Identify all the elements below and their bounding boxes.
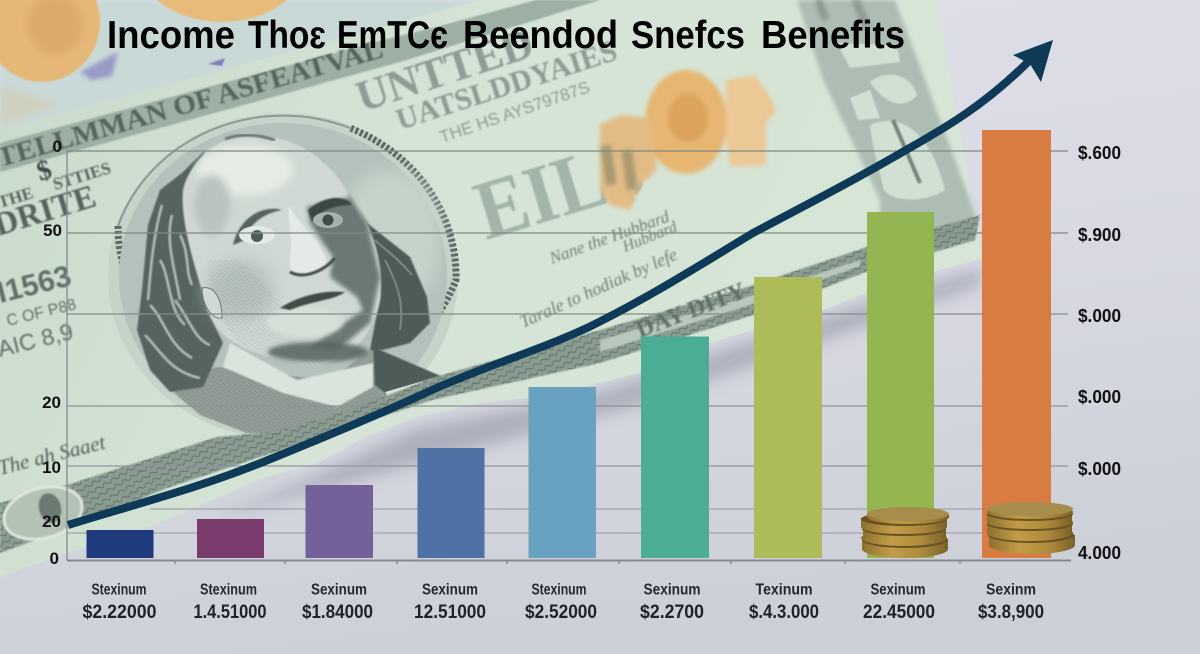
left hair [137, 150, 223, 392]
left axis labels: 20 [42, 393, 61, 412]
lettering on note: EIL$ [464, 120, 654, 258]
title: Snefcs [631, 14, 745, 57]
left axis labels: 0 [53, 137, 62, 156]
left axis labels: 20 [42, 512, 61, 531]
nose [288, 205, 327, 275]
bar category labels: Sexinum [311, 582, 367, 598]
grid lines [67, 151, 1068, 533]
bar value labels: 22.45000 [863, 602, 935, 623]
lower ornamental band [0, 215, 980, 553]
lettering on note: $ [33, 154, 55, 188]
right hair [320, 158, 430, 350]
title: Beendod [463, 14, 618, 57]
right axis labels: $.600 [1078, 143, 1121, 163]
collar [223, 343, 373, 407]
bar category labels: Sexinm [986, 582, 1036, 598]
left axis labels: 0 [50, 549, 59, 568]
handwriting on note: Nane the Hubbard [546, 207, 672, 268]
title: Income [107, 14, 235, 57]
bar value labels: $3.8,900 [978, 602, 1044, 623]
bar chart [86, 130, 1051, 558]
coin stack: left [861, 507, 949, 558]
eyes and brows [233, 209, 282, 245]
coin stack: right [987, 502, 1075, 554]
bar value labels: 1.4.51000 [194, 602, 266, 623]
lower ornamental band: DAY DITY [633, 278, 749, 344]
bar category labels: Sexinum [870, 582, 926, 598]
crown hair [225, 135, 275, 140]
bar value labels: $2.52000 [525, 602, 597, 623]
banknote [0, 0, 982, 577]
bar category labels: Stexinum [92, 582, 146, 598]
bar value labels: $1.84000 [302, 602, 373, 623]
bar value labels: $.4.3.000 [749, 602, 819, 623]
right axis labels: $.000 [1078, 387, 1121, 407]
left axis labels [42, 137, 62, 568]
right axis labels: $.000 [1078, 459, 1121, 479]
lettering on note: UNTTED [350, 18, 539, 122]
bar category labels: Stexinum [200, 582, 257, 598]
lettering on note: THE HS AYS79787S [437, 78, 592, 147]
title: EmTCє [337, 14, 448, 57]
right axis labels: $.000 [1078, 306, 1121, 326]
bar value labels: $2.2700 [640, 602, 704, 623]
shadow under banknote [200, 268, 982, 525]
bar category labels: Sexinum [644, 582, 700, 598]
title: Benefits [761, 14, 905, 57]
left axis labels: 50 [43, 221, 62, 240]
bar category labels [92, 582, 1036, 598]
bar category labels: Sexinum [422, 582, 478, 598]
bar value labels: 12.51000 [414, 602, 486, 623]
bar category labels: Stexinum [532, 582, 586, 598]
shirt and coat [165, 347, 440, 436]
face [183, 135, 381, 365]
handwriting on note: Tarale to hodiak by lefe [516, 244, 680, 332]
handwriting on note [0, 207, 680, 480]
x axis and y axis [67, 151, 1071, 564]
gold coins printed on note [600, 70, 776, 210]
title: Thoɛ [248, 14, 326, 57]
band lettering: TELLMMAN OF ASFEATVAL [0, 34, 386, 173]
growth arrow [68, 40, 1053, 525]
portrait medallion [108, 113, 458, 439]
right axis labels: 4.000 [1078, 543, 1121, 563]
title [107, 14, 905, 57]
bar value labels: $2.22000 [82, 602, 156, 623]
lettering on note [0, 18, 654, 362]
right ornamental border [797, 0, 975, 265]
lettering on note: C OF P88 [5, 296, 78, 330]
right axis labels [1078, 143, 1121, 563]
face shadow [307, 197, 380, 350]
background note and coins [0, 0, 560, 180]
left axis labels: 10 [42, 458, 61, 477]
lettering on note: UATSLDDYAIES [392, 34, 621, 137]
lettering on note: STTIES [51, 158, 113, 194]
bar category labels: Texinum [756, 582, 812, 598]
right axis labels: $.900 [1078, 225, 1121, 245]
handwriting on note: Hubbard [619, 218, 680, 256]
top ornamental band [0, 0, 600, 172]
mouth [280, 292, 345, 310]
left seal [0, 478, 88, 548]
ear [202, 288, 222, 318]
bar value labels [82, 602, 1044, 623]
